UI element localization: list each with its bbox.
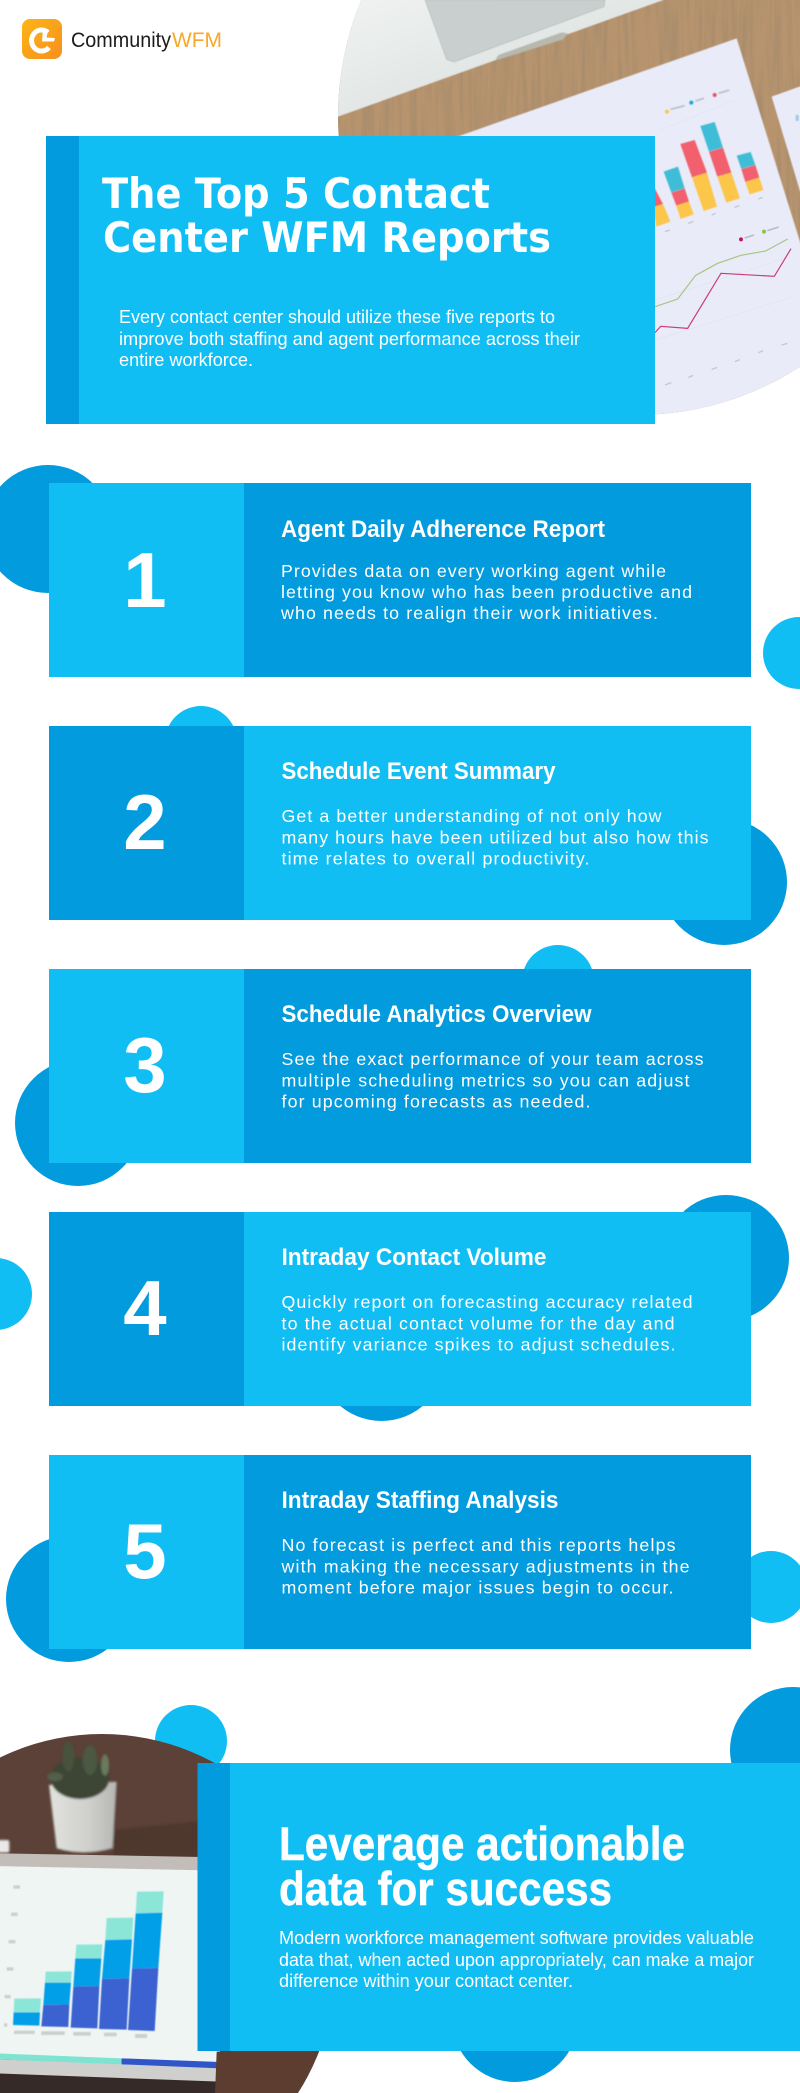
tablet top bezel: [0, 1853, 198, 1870]
heading 4: Intraday Contact Volume: [282, 1244, 546, 1271]
background circles: [0, 465, 800, 2082]
panel: hero intro: [46, 136, 655, 424]
tablet screen: [0, 1866, 220, 2063]
second sheet of paper: [772, 84, 800, 213]
chart axis marks: [4, 1885, 147, 2038]
footer photo: tablet with bar chart and plant: [0, 1720, 330, 2093]
plant leaves: [47, 1742, 109, 1799]
closing text: Modern workforce management software provides valuable: [279, 1927, 754, 1948]
description 3: See the exact performance of your team across: [282, 1049, 704, 1069]
number 1: 1: [123, 536, 167, 624]
hero photo: laptop and paper charts on desk: [338, 0, 800, 414]
plant pot: [49, 1782, 117, 1852]
description 3: multiple scheduling metrics so you can adjust: [282, 1070, 690, 1090]
teal and blue strip: [0, 2053, 122, 2064]
panel: closing call to action: [198, 1763, 800, 2051]
laptop body: [338, 0, 664, 118]
line chart: [655, 197, 791, 385]
panel: report 2: [49, 726, 751, 920]
intro text: Every contact center should utilize these five reports to: [119, 306, 555, 327]
panel: report 5: [49, 1455, 751, 1649]
title: The Top 5 Contact: [102, 169, 490, 218]
description 4: [282, 1292, 692, 1354]
number 2: 2: [123, 778, 167, 866]
closing text: difference within your contact center.: [279, 1970, 573, 1991]
hand: [215, 2048, 320, 2093]
description 1: [280, 561, 692, 623]
intro text: [119, 306, 580, 370]
first sheet of paper: [457, 38, 800, 414]
closing text: data that, when acted upon appropriately, can make a major: [279, 1949, 754, 1970]
logo: [22, 19, 222, 59]
tablet lower edge: [0, 2059, 220, 2083]
description 3: for upcoming forecasts as needed.: [282, 1092, 590, 1112]
description 4: Quickly report on forecasting accuracy related: [282, 1292, 692, 1312]
heading 2: Schedule Event Summary: [282, 758, 556, 785]
icon: orange rounded clock: [22, 19, 62, 59]
heading 3: Schedule Analytics Overview: [282, 1001, 592, 1028]
stacked bar chart: [653, 90, 763, 227]
heading 1: Agent Daily Adherence Report: [281, 516, 605, 543]
number 4: 4: [123, 1264, 167, 1352]
description 2: [282, 806, 709, 868]
bar chart on tablet: [13, 1891, 164, 2031]
description 5: No forecast is perfect and this reports helps: [282, 1535, 676, 1555]
number 5: 5: [123, 1507, 167, 1595]
description 1: letting you know who has been productive and: [281, 582, 692, 602]
description 5: with making the necessary adjustments in the: [280, 1556, 690, 1576]
intro text: improve both staffing and agent performance across their: [119, 328, 580, 349]
description 4: identify variance spikes to adjust schedules.: [282, 1334, 676, 1354]
closing heading: [279, 1817, 685, 1915]
intro text: entire workforce.: [119, 349, 253, 370]
closing heading: data for success: [279, 1862, 612, 1915]
closing text: [279, 1927, 754, 1991]
trackpad: [425, 0, 605, 62]
number 3: 3: [123, 1021, 167, 1109]
logo: WFM: [172, 29, 222, 52]
description 2: time relates to overall productivity.: [282, 848, 590, 868]
panel: report 1: [49, 483, 751, 677]
title: [102, 169, 551, 262]
heading 5: Intraday Staffing Analysis: [282, 1487, 558, 1514]
laptop notch: [495, 32, 568, 61]
title: Center WFM Reports: [103, 213, 551, 262]
description 1: who needs to realign their work initiatives.: [280, 603, 658, 623]
description 5: [280, 1535, 690, 1598]
panel: report 4: [49, 1212, 751, 1406]
description 4: to the actual contact volume for the day and: [282, 1314, 674, 1334]
logo wordmark: Community: [71, 29, 171, 52]
description 1: Provides data on every working agent while: [281, 561, 666, 581]
description 2: Get a better understanding of not only how: [282, 806, 662, 826]
panel: report 3: [49, 969, 751, 1163]
description 3: [282, 1049, 704, 1112]
description 5: moment before major issues begin to occur.: [282, 1578, 674, 1598]
closing heading: Leverage actionable: [279, 1817, 685, 1870]
description 2: many hours have been utilized but also how this: [282, 828, 709, 848]
